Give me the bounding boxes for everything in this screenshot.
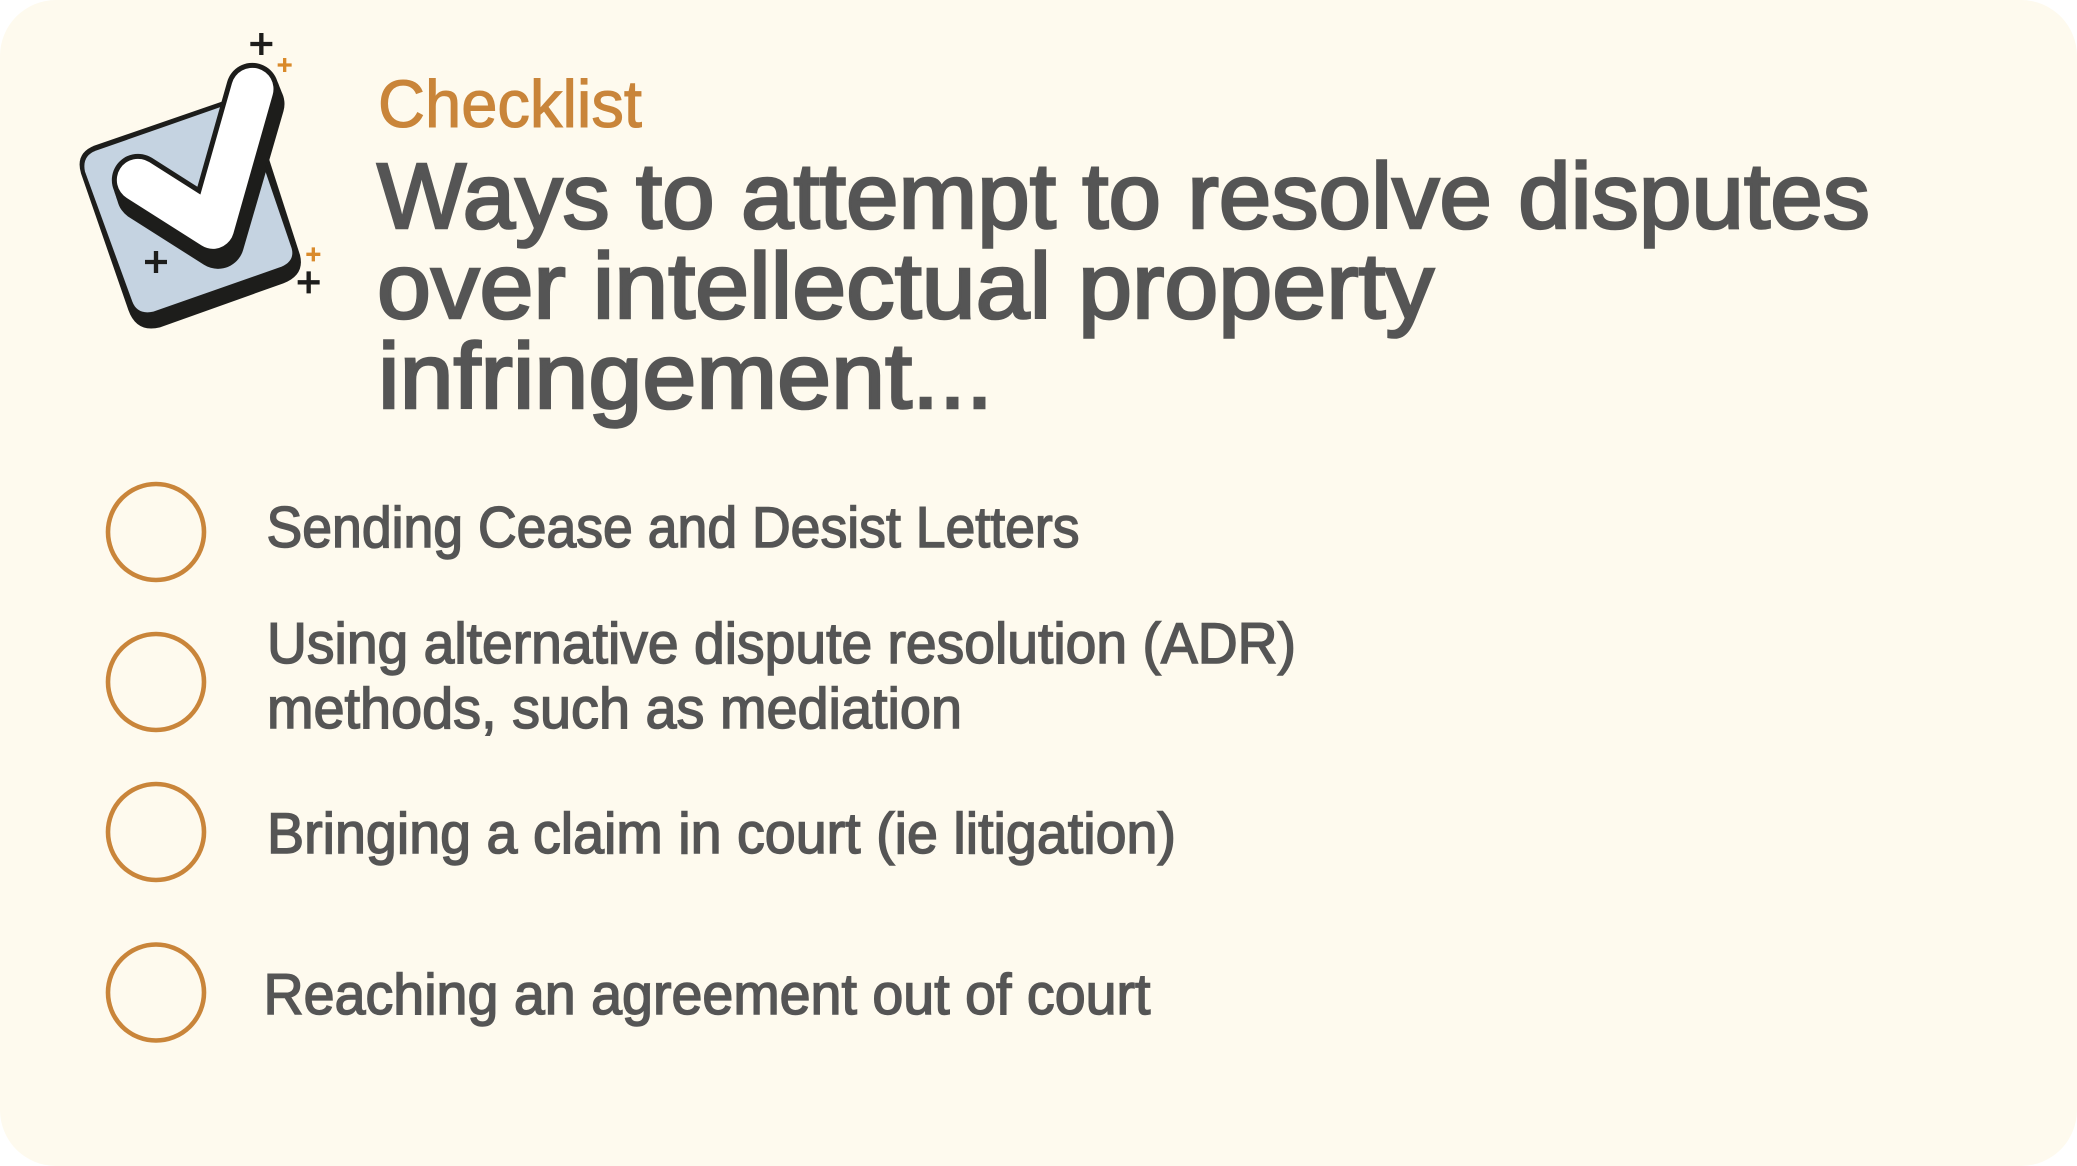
heading: title: Ways to attempt to resolve disputes <box>377 144 1870 248</box>
checklist item 1: Sending Cease and Desist Letters <box>266 496 1080 560</box>
heading: title: infringement... <box>378 324 993 428</box>
checklist item 4: Reaching an agreement out of court <box>264 963 1151 1027</box>
checklist item 2 <box>108 612 1296 741</box>
checklist item 3: Bringing a claim in court (ie litigation) <box>267 802 1176 866</box>
icon: check mark <box>138 89 260 246</box>
checklist item 4 <box>108 944 1151 1040</box>
heading: title <box>377 144 1870 428</box>
eyebrow: Checklist: Checklist <box>378 67 642 142</box>
icon: checkbox body <box>80 100 301 329</box>
icon: sparkle plus signs <box>145 33 320 293</box>
checklist item 2: methods, such as mediation <box>267 677 962 741</box>
heading: title: over intellectual property <box>377 234 1435 338</box>
icon: tilted checkbox with check mark <box>80 33 320 329</box>
checklist item 1 <box>108 484 1080 580</box>
checklist item 2: Using alternative dispute resolution (ADR) <box>267 612 1296 676</box>
checklist item 3 <box>108 784 1176 880</box>
